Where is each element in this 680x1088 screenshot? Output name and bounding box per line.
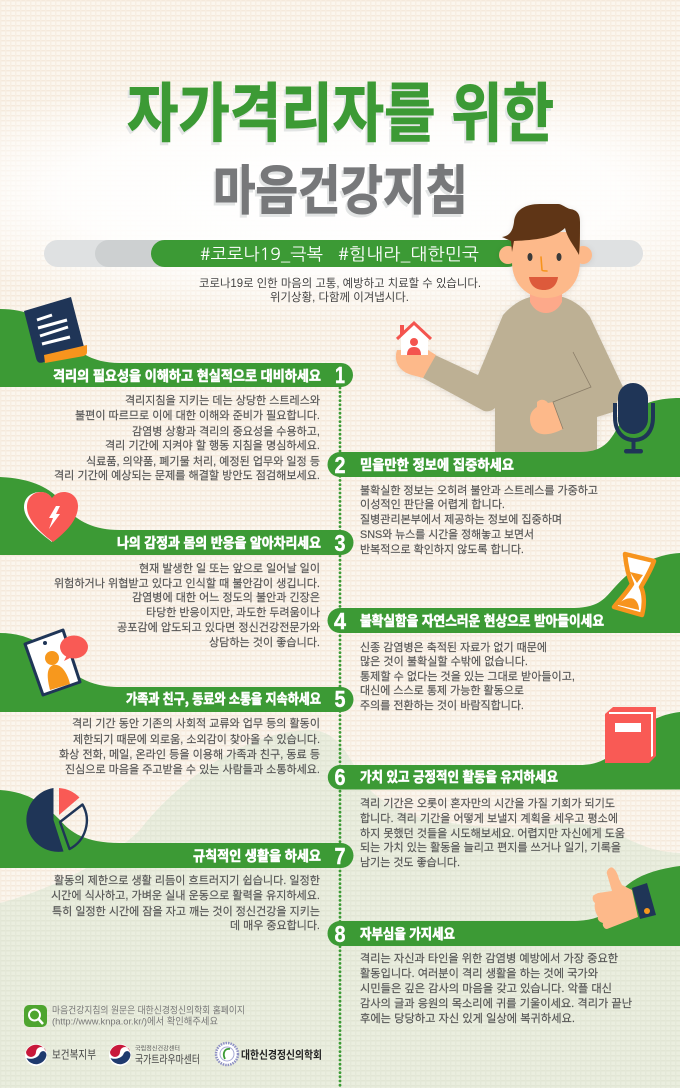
icon: tablet video call <box>25 630 88 695</box>
icon: search <box>24 1005 47 1027</box>
heading 6: 가치 있고 긍정적인 활동을 유지하세요 <box>360 767 558 787</box>
body 6: 되는 가치 있는 활동을 늘리고 편지를 쓰거나 일기, 기록을 <box>360 840 621 854</box>
panel 2 <box>328 383 680 556</box>
body 5: 화상 전화, 메일, 온라인 등을 이용해 가족과 친구, 동료 등 <box>59 747 320 761</box>
number 2: 2 <box>334 452 346 478</box>
heading 4: 불확실함을 자연스러운 현상으로 받아들이세요 <box>360 611 604 631</box>
body 8: 후에는 당당하고 자신 있게 일상에 복귀하세요. <box>360 1011 575 1025</box>
section 6 ribbon <box>328 712 680 790</box>
title line 1: 자가격리자를 위한 <box>127 63 554 155</box>
body 4: 통제할 수 없다는 것을 있는 그대로 받아들이고, <box>360 670 575 683</box>
body 1: 식료품, 의약품, 폐기물 처리, 예정된 업무와 일정 등 <box>86 454 320 468</box>
logo: National Center for Disaster Trauma: 국가트라우마센터 <box>135 1053 200 1066</box>
number 8: 8 <box>334 921 346 947</box>
section 8 ribbon <box>328 866 680 946</box>
section 2 ribbon <box>328 398 680 477</box>
source text <box>52 1004 245 1028</box>
body 3: 타당한 반응이지만, 과도한 두려움이나 <box>146 606 320 619</box>
body 5: 진심으로 마음을 주고받을 수 있는 사람들과 소통하세요. <box>65 762 320 776</box>
body 3: 공포감에 압도되고 있다면 정신건강전문가와 <box>117 621 320 634</box>
panel 1 <box>0 297 353 482</box>
body 4: 신종 감염병은 축적된 자료가 없기 때문에 <box>360 641 547 654</box>
heading 5: 가족과 친구, 동료와 소통을 지속하세요 <box>126 689 321 709</box>
background: sage hill shape <box>0 730 680 1088</box>
body 3: 감염병에 대한 어느 정도의 불안과 긴장은 <box>132 591 320 604</box>
body 2: 반복적으로 확인하지 않도록 합니다. <box>360 542 524 556</box>
body 5: 제한되기 때문에 외로움, 소외감이 찾아올 수 있습니다. <box>73 733 320 746</box>
panel 7 <box>0 788 354 932</box>
panel 4 <box>328 553 680 712</box>
section 3 ribbon <box>0 477 354 555</box>
body 1: 격리 기간에 지켜야 할 행동 지침을 명심하세요. <box>105 438 320 452</box>
body 1 <box>54 394 320 482</box>
source text: (http://www.knpa.or.kr/)에서 확인해주세요 <box>52 1016 218 1028</box>
body 4 <box>360 641 575 712</box>
dotted timeline <box>339 388 341 1088</box>
body 6: 합니다. 격리 기간을 어떻게 보낼지 계획을 세우고 평소에 <box>360 812 618 825</box>
logo: Ministry of Health and Welfare: 보건복지부 <box>52 1048 96 1062</box>
icon: house with person <box>397 323 431 355</box>
right fist <box>530 400 563 434</box>
body 5: 격리 기간 동안 기존의 사회적 교류와 업무 등의 활동이 <box>72 716 320 730</box>
body 7: 특히 일정한 시간에 잠을 자고 깨는 것이 정신건강을 지키는 <box>52 904 320 918</box>
logo: Ministry of Health and Welfare <box>25 1044 96 1066</box>
footer source note <box>24 1004 245 1028</box>
heading 2: 믿을만한 정보에 집중하세요 <box>360 455 514 475</box>
panel 3 <box>0 477 354 649</box>
section 5 ribbon <box>0 633 354 712</box>
body 3: 현재 발생한 일 또는 앞으로 일어날 일이 <box>139 561 320 575</box>
body 8: 격리는 자신과 타인을 위한 감염병 예방에서 가장 중요한 <box>360 952 618 965</box>
body 4: 많은 것이 불확실할 수밖에 없습니다. <box>360 655 528 668</box>
body 3: 상담하는 것이 좋습니다. <box>209 635 320 649</box>
icon: document <box>24 297 87 363</box>
title line 2: 마음건강지침 <box>213 149 468 225</box>
logo: Korean Neuropsychiatric Association: 대한신경정신의학회 <box>241 1046 322 1062</box>
face <box>512 232 580 298</box>
section 1 ribbon <box>0 309 353 387</box>
hashtag banner <box>44 240 643 267</box>
logo: National Center for Disaster Trauma: 국립정신건강센터 <box>135 1044 180 1052</box>
ears <box>499 246 592 264</box>
body 6: 남기는 것도 좋습니다. <box>360 856 460 869</box>
logo: National Center for Disaster Trauma <box>109 1044 200 1066</box>
number 4: 4 <box>334 608 346 634</box>
intro text: 코로나19로 인한 마음의 고통, 예방하고 치료할 수 있습니다. <box>199 276 481 290</box>
nose <box>541 257 547 271</box>
mouth <box>529 277 558 290</box>
number 3: 3 <box>334 530 346 556</box>
body 4: 대신에 스스로 통제 가능한 활동으로 <box>360 683 524 697</box>
source text: 마음건강지침의 원문은 대한신경정신의학회 홈페이지 <box>52 1004 245 1016</box>
eyes <box>528 253 562 261</box>
icon: thumbs up <box>593 867 656 929</box>
heading 8: 자부심을 가지세요 <box>360 924 455 944</box>
body 3: 위험하거나 위협받고 있다고 인식할 때 불안감이 생깁니다. <box>54 576 320 590</box>
body 2: SNS와 뉴스를 시간을 정해놓고 보면서 <box>360 527 534 541</box>
icon: microphone <box>615 383 653 454</box>
panel 5 <box>0 630 354 776</box>
body 8: 시민들은 깊은 감사의 마음을 갖고 있습니다. 악플 대신 <box>360 982 612 995</box>
body 1: 격리 기간에 예상되는 문제를 해결할 방안도 점검해보세요. <box>54 468 320 482</box>
character: man holding house <box>396 204 623 452</box>
body 7: 시간에 식사하고, 가벼운 실내 운동으로 활력을 유지하세요. <box>51 888 320 902</box>
neck <box>530 290 562 313</box>
sleeve line <box>553 352 591 429</box>
body 7 <box>51 873 320 932</box>
intro text <box>199 276 481 304</box>
body 6 <box>360 797 625 869</box>
number 5: 5 <box>334 686 346 712</box>
body 7: 활동의 제한으로 생활 리듬이 흐트러지기 쉽습니다. 일정한 <box>54 873 320 887</box>
body 8: 감사의 글과 응원의 목소리에 귀를 기울이세요. 격리가 끝난 <box>360 997 632 1010</box>
section 7 ribbon <box>0 790 354 868</box>
number 7: 7 <box>334 843 346 869</box>
body 2 <box>360 483 598 556</box>
body 2: 이성적인 판단을 어렵게 합니다. <box>360 498 505 511</box>
body 1: 감염병 상황과 격리의 중요성을 수용하고, <box>132 424 320 438</box>
heading 1: 격리의 필요성을 이해하고 현실적으로 대비하세요 <box>53 366 321 386</box>
number 6: 6 <box>334 764 346 790</box>
shirt <box>423 297 623 452</box>
icon: red book <box>605 707 656 763</box>
left hand <box>396 350 436 378</box>
intro text: 위기상황, 다함께 이겨냅시다. <box>270 291 409 304</box>
icon: pie chart <box>26 788 87 852</box>
section 4 ribbon <box>328 553 680 633</box>
body 7: 데 매우 중요합니다. <box>230 919 320 932</box>
number 1: 1 <box>335 362 345 388</box>
heading 3: 나의 감정과 몸의 반응을 알아차리세요 <box>117 533 321 553</box>
panel 6 <box>328 707 680 869</box>
body 6: 하지 못했던 것들을 시도해보세요. 어렵지만 자신에게 도움 <box>360 826 625 840</box>
title <box>127 63 554 225</box>
icon: heart <box>24 492 78 542</box>
body 6: 격리 기간은 오롯이 혼자만의 시간을 가질 기회가 되기도 <box>360 797 615 810</box>
logo: Korean Neuropsychiatric Association <box>216 1043 322 1065</box>
body 4: 주의를 전환하는 것이 바람직합니다. <box>360 698 524 712</box>
panel 8 <box>328 866 680 1025</box>
hair <box>502 204 580 255</box>
hashtag text 2: #힘내라_대한민국 <box>338 245 479 263</box>
hashtag text 1: #코로나19_극복 <box>200 245 323 263</box>
icon: hourglass <box>614 554 654 615</box>
body 5 <box>59 716 320 776</box>
body 3 <box>54 561 320 649</box>
body 2: 질병관리본부에서 제공하는 정보에 집중하며 <box>360 512 562 526</box>
heading 7: 규칙적인 생활을 하세요 <box>193 846 321 866</box>
body 1: 불편이 따르므로 이에 대한 이해와 준비가 필요합니다. <box>75 408 320 422</box>
body 8: 활동입니다. 여러분이 격리 생활을 하는 것에 국가와 <box>360 966 598 980</box>
body 1: 격리지침을 지키는 데는 상당한 스트레스와 <box>125 394 320 407</box>
body 2: 불확실한 정보는 오히려 불안과 스트레스를 가중하고 <box>360 483 598 497</box>
body 8 <box>360 952 632 1025</box>
